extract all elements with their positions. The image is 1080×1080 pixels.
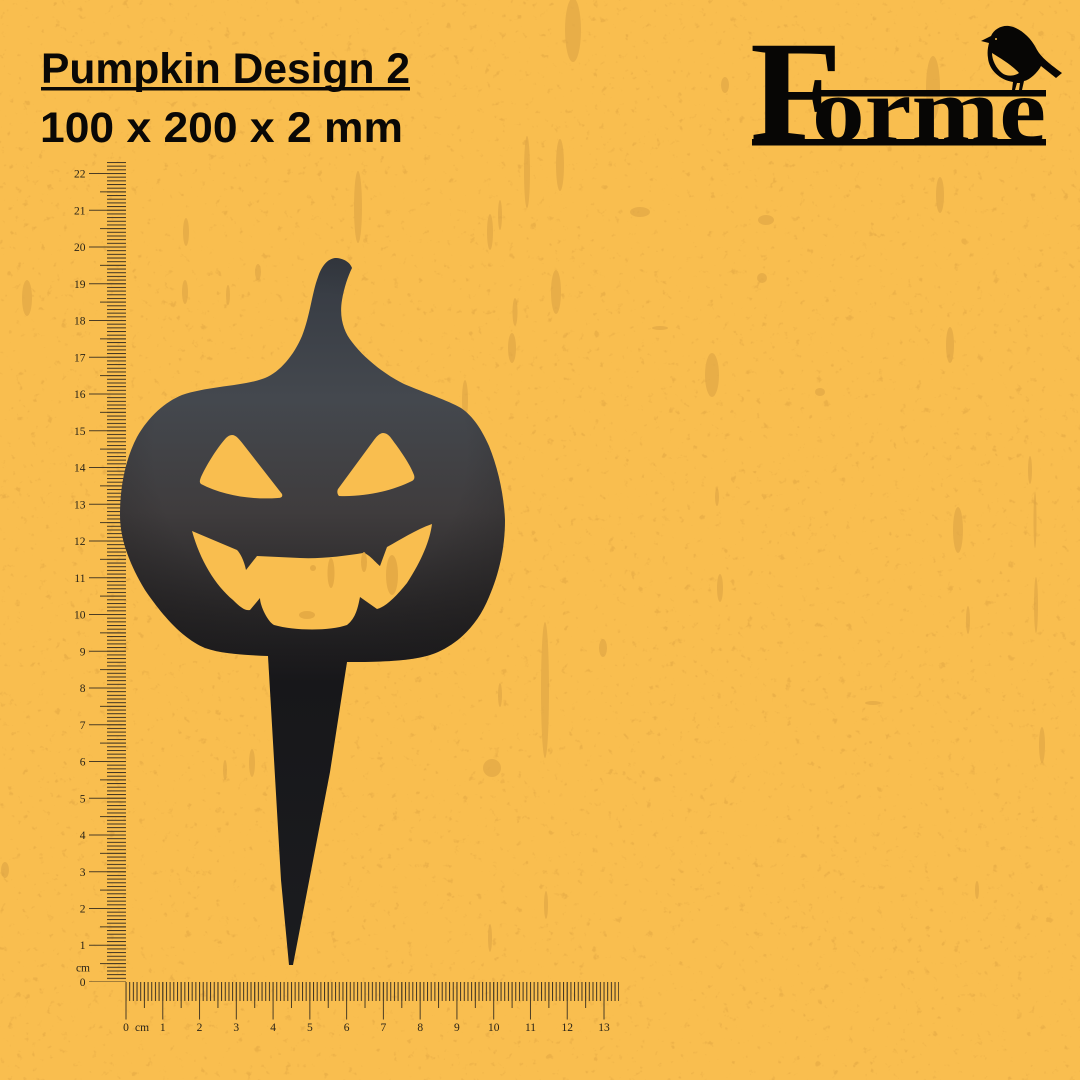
logo: Forme with bird bbox=[750, 13, 1062, 172]
horizontal ruler labels: 11 bbox=[525, 1022, 536, 1034]
vertical ruler labels: 22 bbox=[74, 168, 86, 180]
horizontal ruler labels: 7 bbox=[381, 1022, 387, 1034]
horizontal ruler labels: 0 bbox=[123, 1022, 129, 1034]
logo: Forme with bird: orme bbox=[812, 59, 1046, 161]
vertical ruler labels: 6 bbox=[80, 756, 86, 768]
pumpkin body bbox=[120, 258, 505, 965]
horizontal ruler labels: 2 bbox=[197, 1022, 203, 1034]
vertical ruler labels: 1 bbox=[80, 940, 86, 952]
vertical ruler labels: 16 bbox=[74, 389, 86, 401]
vertical ruler labels: 14 bbox=[74, 462, 86, 474]
horizontal ruler labels: 10 bbox=[488, 1022, 500, 1034]
horizontal ruler bbox=[123, 982, 619, 1034]
vertical ruler labels: 8 bbox=[80, 683, 86, 695]
horizontal ruler labels: 1 bbox=[160, 1022, 166, 1034]
vertical ruler labels: 0 bbox=[80, 977, 86, 989]
horizontal ruler labels: 9 bbox=[454, 1022, 460, 1034]
horizontal ruler labels: cm bbox=[135, 1022, 149, 1034]
pumpkin stake silhouette bbox=[100, 250, 520, 965]
mouth bbox=[192, 524, 432, 630]
vertical ruler labels: 11 bbox=[74, 573, 86, 585]
vertical ruler labels: 12 bbox=[74, 536, 86, 548]
horizontal ruler labels: 8 bbox=[417, 1022, 423, 1034]
title: Pumpkin Design 2 bbox=[41, 45, 410, 93]
vertical ruler labels: cm bbox=[76, 962, 90, 974]
vertical ruler labels: 13 bbox=[74, 499, 86, 511]
horizontal ruler labels: 13 bbox=[598, 1022, 610, 1034]
logo: Forme with bird: F bbox=[750, 13, 842, 172]
vertical ruler labels: 5 bbox=[80, 793, 86, 805]
icon: bird bbox=[981, 26, 1062, 90]
horizontal ruler labels: 4 bbox=[270, 1022, 276, 1034]
vertical ruler labels bbox=[74, 168, 90, 989]
vertical ruler labels: 10 bbox=[74, 610, 86, 622]
left eye bbox=[200, 435, 282, 498]
vertical ruler labels: 7 bbox=[80, 720, 86, 732]
right eye bbox=[337, 433, 414, 496]
mouth speckles bbox=[299, 552, 398, 619]
vertical ruler labels: 21 bbox=[74, 205, 86, 217]
dimensions text: 100 x 200 x 2 mm bbox=[40, 104, 403, 152]
vertical ruler bbox=[74, 160, 126, 989]
vertical ruler labels: 17 bbox=[74, 352, 86, 364]
face openings bbox=[192, 433, 432, 630]
horizontal ruler labels: 12 bbox=[561, 1022, 573, 1034]
vertical ruler labels: 2 bbox=[80, 904, 86, 916]
vertical ruler labels: 3 bbox=[80, 867, 86, 879]
metal surface shading bbox=[120, 258, 505, 670]
vertical ruler labels: 18 bbox=[74, 316, 86, 328]
vertical ruler labels: 9 bbox=[80, 646, 86, 658]
vertical ruler labels: 20 bbox=[74, 242, 86, 254]
horizontal ruler labels bbox=[123, 1022, 610, 1034]
horizontal ruler labels: 3 bbox=[233, 1022, 239, 1034]
horizontal ruler labels: 5 bbox=[307, 1022, 313, 1034]
vertical ruler labels: 15 bbox=[74, 426, 86, 438]
vertical ruler labels: 4 bbox=[80, 830, 86, 842]
horizontal ruler labels: 6 bbox=[344, 1022, 350, 1034]
vertical ruler labels: 19 bbox=[74, 279, 86, 291]
